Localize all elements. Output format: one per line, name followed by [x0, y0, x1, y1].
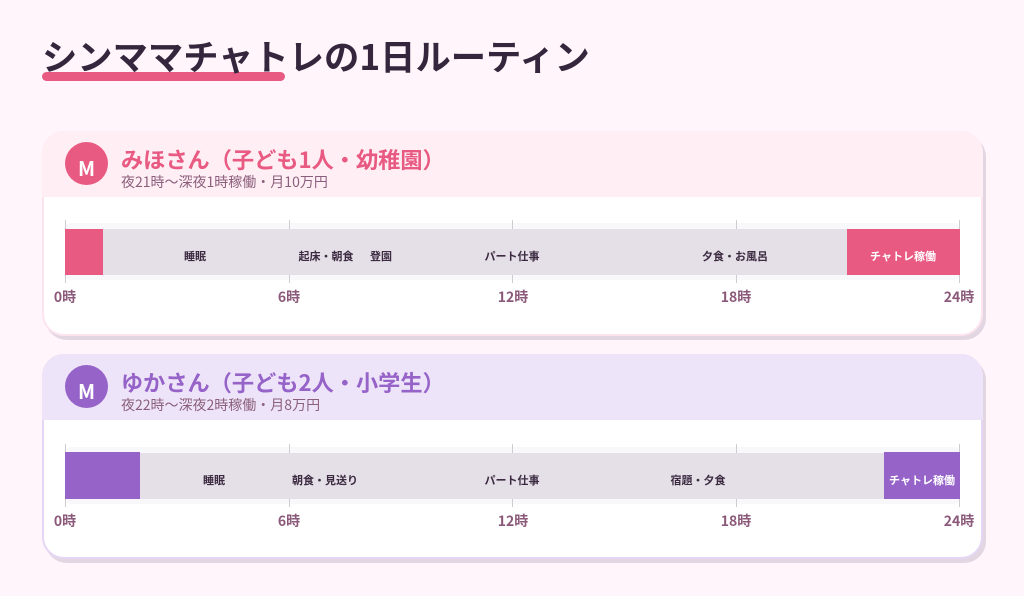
chart: Miho timeline — [54, 220, 974, 307]
chart: Yuka timeline — [54, 444, 974, 531]
axis labels: 0時 — [54, 287, 76, 307]
axis labels: 12時 — [498, 287, 528, 307]
segment: evening work — [847, 229, 960, 275]
segment: late-night work — [65, 452, 140, 499]
label: dinner and bath: 夕食・お風呂 — [702, 248, 768, 264]
axis labels: 6時 — [278, 287, 300, 307]
title — [42, 30, 590, 81]
axis labels: 12時 — [498, 511, 528, 531]
label: part-time: パート仕事 — [484, 248, 540, 264]
text: Yuka schedule: 夜22時〜深夜2時稼働・月8万円 — [121, 395, 320, 415]
label: drop-off: 登園 — [370, 248, 392, 264]
icon: Yuka avatar: M — [78, 376, 95, 405]
segment: evening work — [884, 452, 960, 499]
axis labels: 18時 — [721, 287, 751, 307]
label: chat work: チャトレ稼働 — [870, 248, 936, 264]
panel: Miho — [42, 131, 986, 340]
axis labels — [54, 287, 974, 307]
icon: Miho avatar: M — [78, 153, 95, 182]
label: sleep: 睡眠 — [203, 472, 225, 488]
title underline — [42, 72, 285, 81]
label: sleep: 睡眠 — [184, 248, 206, 264]
icon: Miho avatar — [65, 142, 108, 185]
title text: シンママチャトレの1日ルーティン — [42, 30, 590, 81]
heading: Miho: みほさん（子ども1人・幼稚園） — [121, 143, 445, 175]
label: homework and dinner: 宿題・夕食 — [670, 472, 726, 488]
label: part-time: パート仕事 — [484, 472, 540, 488]
axis labels: 18時 — [721, 511, 751, 531]
segment: late-night work — [65, 229, 103, 275]
label: breakfast: 起床・朝食 — [298, 248, 354, 264]
axis labels: 24時 — [944, 511, 974, 531]
label: chat work: チャトレ稼働 — [889, 472, 955, 488]
axis labels — [54, 511, 974, 531]
axis labels: 6時 — [278, 511, 300, 531]
panel: Yuka — [42, 354, 986, 563]
text: Miho schedule: 夜21時〜深夜1時稼働・月10万円 — [121, 172, 328, 192]
label: breakfast and send-off: 朝食・見送り — [292, 472, 358, 488]
icon: Yuka avatar — [65, 365, 108, 408]
heading: Yuka: ゆかさん（子ども2人・小学生） — [121, 366, 445, 398]
axis labels: 24時 — [944, 287, 974, 307]
axis labels: 0時 — [54, 511, 76, 531]
